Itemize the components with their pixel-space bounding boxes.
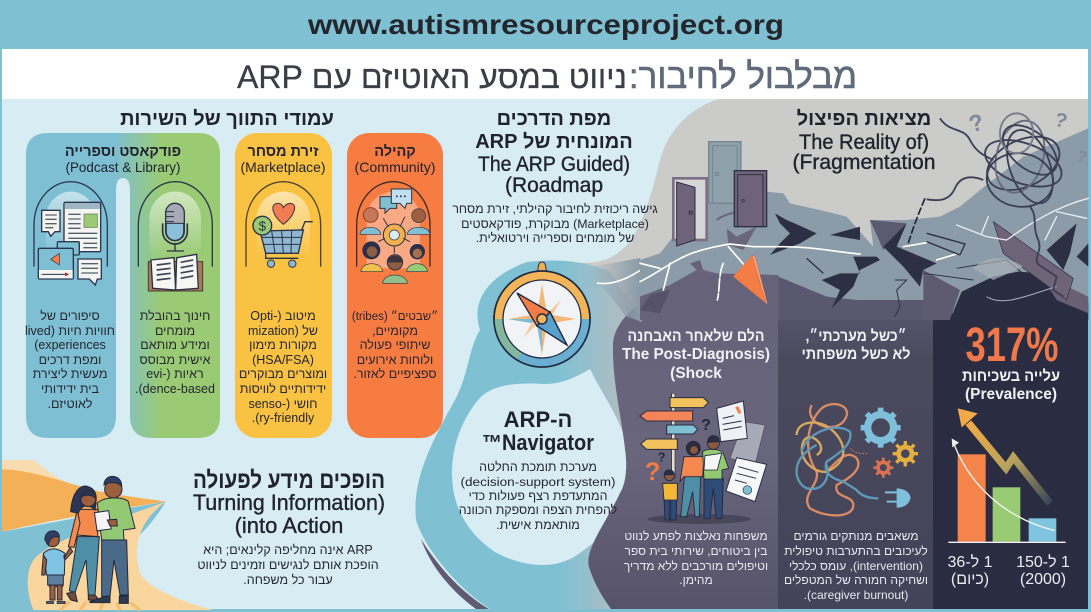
text: action body	[197, 543, 379, 587]
heading: turning information into action: Turning Information)	[193, 490, 385, 515]
rock: fading left ledge	[585, 258, 647, 322]
text: lived experiences: בית ידידותי	[41, 382, 100, 396]
heading: fragmentation: The Reality of)	[799, 131, 929, 154]
panel: podcast and library	[25, 133, 220, 438]
text: action body: עבור כל משפחה.	[243, 573, 333, 587]
panel: community	[347, 133, 443, 438]
text: failure body: לעיכובים בהתערבות טיפולית	[784, 544, 928, 558]
panel: podcast and library: (Podcast & Library)	[66, 159, 180, 175]
icon: broken doors	[673, 142, 767, 246]
text: failure body: ושחיקה חמורה של המטפלים	[784, 573, 928, 587]
illustration: family on path	[2, 460, 213, 610]
illustration: tangled cables and gears	[797, 404, 918, 515]
arrow: rising trend	[958, 408, 1050, 503]
heading: fragmentation: מציאות הפיצול	[797, 108, 931, 130]
icon: articles and media	[34, 182, 107, 285]
heading: guided roadmap	[452, 108, 658, 245]
panel: systemic failure	[778, 300, 933, 609]
text: navigator body: מערכת תומכת החלטה	[479, 460, 597, 474]
chart labels: (כיום)	[951, 571, 989, 588]
text: failure body: משאבים מנותקים גורמים	[794, 529, 918, 543]
text: optimization	[239, 309, 327, 425]
panel: community: (Community)	[354, 159, 436, 175]
text: roadmap body	[452, 202, 658, 245]
chart labels: 1 ל-36	[948, 553, 993, 571]
text: failure body: .(caregiver burnout)	[804, 588, 908, 602]
icon: large blue gear	[861, 408, 901, 448]
heading: service pillars: עמודי התווך של השירות	[120, 108, 334, 130]
white cracks	[640, 198, 1088, 300]
text: optimization: Opti-) מיטוב	[250, 309, 316, 323]
text: navigator body: מותאמת אישית.	[496, 518, 580, 532]
icon: question marks: ?	[966, 109, 986, 137]
figure: woman	[67, 486, 99, 602]
text: optimization: .(ry-friendly	[252, 411, 315, 425]
heading: systemic failure: לא כשל משפחתי	[802, 346, 911, 363]
heading: systemic failure: ״כשל מערכתי״,	[806, 328, 906, 345]
heading: post-diagnosis shock: The Post-Diagnosis)	[622, 346, 770, 363]
illustration: family at signpost	[640, 393, 767, 524]
background: grey fragmented sky	[570, 99, 1088, 330]
stat: 317 percent: 317%	[966, 319, 1058, 372]
illustration: family at signpost: ?	[701, 417, 711, 434]
icon: small gears	[873, 441, 918, 478]
text: lived experiences: ומפת דרכים	[39, 353, 101, 367]
background: navigator light blob	[452, 369, 630, 565]
text: navigator body	[459, 460, 617, 532]
heading: guided roadmap: The ARP Guided)	[478, 153, 630, 176]
text: action body: ARP אינה מחליפה קלינאים; היא	[203, 543, 373, 557]
heading: turning information into action	[193, 467, 385, 587]
heading: turning information into action: הופכים מידע לפעולה	[193, 467, 385, 494]
text: navigator body: המתעדפת רצף פעולות כדי	[469, 489, 607, 503]
text: failure body: (intervention), עומס כלכלי	[789, 559, 923, 573]
text: lived experiences: מעשית ליצירת	[33, 367, 107, 381]
icon: orange warning shard	[733, 255, 768, 304]
text: tribes	[352, 310, 438, 381]
text: shock body	[624, 529, 768, 587]
title: ניווט במסע האוטיזם עם ARP	[237, 59, 627, 95]
text: navigator body: (decision-support system)	[460, 475, 616, 489]
text: lived experiences: סיפורים של	[40, 309, 100, 323]
text: tribes: ספציפיים לאזור.	[353, 367, 437, 381]
heading: guided roadmap: מפת הדרכים	[497, 108, 611, 130]
text: optimization: (HSA/FSA)	[252, 353, 314, 367]
text: lived experiences: lived) חוויות חיות	[25, 324, 115, 338]
panel: podcast and library: פודקאסט וספרייה	[65, 144, 181, 160]
text: optimization: מקורות מימון	[249, 338, 317, 352]
background: teal river around compass	[415, 260, 650, 609]
heading: guided roadmap: המונחית של ARP	[475, 131, 633, 153]
dark sliver	[421, 539, 489, 609]
text: lived experiences	[25, 309, 115, 411]
header bar: www.autismresourceproject.org	[307, 9, 784, 40]
heading: guided roadmap: (Roadmap	[505, 174, 603, 197]
illustration: family at signpost: ?	[658, 451, 666, 465]
text: shock body: בין ביטוחים, שירותי בית ספר	[625, 544, 767, 558]
bar chart: prevalence	[948, 408, 1066, 542]
text: shock body: מהימן.	[679, 573, 713, 587]
text: expert education: אישית מבוסס	[140, 353, 211, 367]
panel: marketplace: (Marketplace)	[240, 159, 326, 175]
heading: navigator: ™Navigator	[482, 430, 594, 455]
text: shock body: משפחות נאלצות לפתע לנווט	[624, 529, 768, 543]
heading: fragmentation	[792, 108, 936, 174]
text: optimization: senso-) חושי	[248, 397, 318, 411]
text: optimization: ומוצרים מבוקרים	[239, 367, 327, 381]
illustration: cracked landscape	[640, 109, 1089, 320]
heading: post-diagnosis shock	[622, 328, 770, 382]
text: expert education: .(dence-based	[135, 382, 215, 396]
text: roadmap body: של מומחים וספרייה וירטואלית.	[476, 231, 634, 245]
panel: post-diagnosis shock	[588, 300, 778, 609]
icon: cart with heart	[246, 182, 321, 267]
icon: compass	[494, 262, 590, 367]
figure: child	[42, 531, 73, 603]
stat: 317 percent	[962, 319, 1060, 403]
text: roadmap body: (Marketplace) מבוקרת, פודקאסטים	[461, 217, 649, 231]
text: lived experiences: (experiences	[34, 338, 106, 352]
text: failure body	[784, 529, 928, 602]
heading: post-diagnosis shock: (Shock	[670, 365, 722, 382]
heading: systemic failure	[802, 328, 911, 363]
icon: tangled scribble	[927, 113, 1068, 297]
text: roadmap body: גישה ריכוזית לחיבור קהילתי, זירת מסחר	[452, 202, 658, 216]
panel: prevalence	[933, 304, 1088, 609]
text: expert education: חינוך בהובלת	[140, 309, 210, 323]
chart labels: (2000)	[1020, 571, 1066, 588]
icon: question marks: ?	[1052, 109, 1070, 133]
heading: turning information into action: (into Action	[235, 513, 343, 538]
heading: post-diagnosis shock: הלם שלאחר האבחנה	[628, 328, 764, 345]
icon: plug	[885, 488, 911, 508]
illustration: family at signpost: ?	[645, 458, 660, 486]
text: optimization: ידידותיים לוויסות	[240, 382, 326, 396]
icon: microphone and book	[138, 182, 212, 291]
chart labels	[948, 553, 1070, 588]
icon: cart with heart: $	[259, 219, 267, 234]
panel: marketplace: זירת מסחר	[247, 144, 319, 160]
arrow: white curve	[952, 438, 1055, 531]
heading: navigator	[459, 407, 617, 532]
icon: community circle	[357, 182, 430, 283]
title: מבלבול לחיבור:	[629, 57, 857, 96]
icon: question marks: ?	[1074, 148, 1089, 167]
text: expert education: מומחים	[155, 324, 195, 338]
chart labels: 1 ל-150	[1016, 553, 1070, 571]
text: tribes: (tribes) ״שבטים״	[352, 310, 438, 323]
text: expert education	[135, 309, 215, 396]
text: action body: הופכת אותם לנגישים וזמינים לניווט	[197, 558, 379, 572]
text: shock body: וטיפולים מורכבים ללא מדריך	[624, 559, 768, 573]
stat: 317 percent: (Prevalence)	[965, 386, 1057, 403]
text: optimization: mization) של	[248, 324, 318, 338]
text: expert education: evi-) ראיות	[146, 367, 204, 381]
text: tribes: ולוחות אירועים	[357, 353, 433, 367]
panel: marketplace	[235, 133, 332, 438]
text: tribes: מקומיים,	[372, 324, 418, 338]
icon: question marks	[966, 109, 1089, 167]
heading: navigator: ה-ARP	[504, 407, 572, 432]
text: navigator body: להפחית הצפה ומספקת הכוונה	[459, 503, 617, 517]
figure: man	[90, 476, 135, 603]
text: expert education: ומידע מותאם	[140, 338, 210, 352]
panel: community: קהילה	[374, 144, 416, 160]
text: lived experiences: לאוטיזם.	[48, 397, 93, 411]
heading: fragmentation: (Fragmentation	[792, 151, 936, 174]
title	[2, 49, 1088, 99]
figure: adults and child	[663, 435, 729, 520]
text: tribes: שיתופי פעולה	[360, 338, 430, 352]
stat: 317 percent: עלייה בשכיחות	[962, 368, 1060, 385]
